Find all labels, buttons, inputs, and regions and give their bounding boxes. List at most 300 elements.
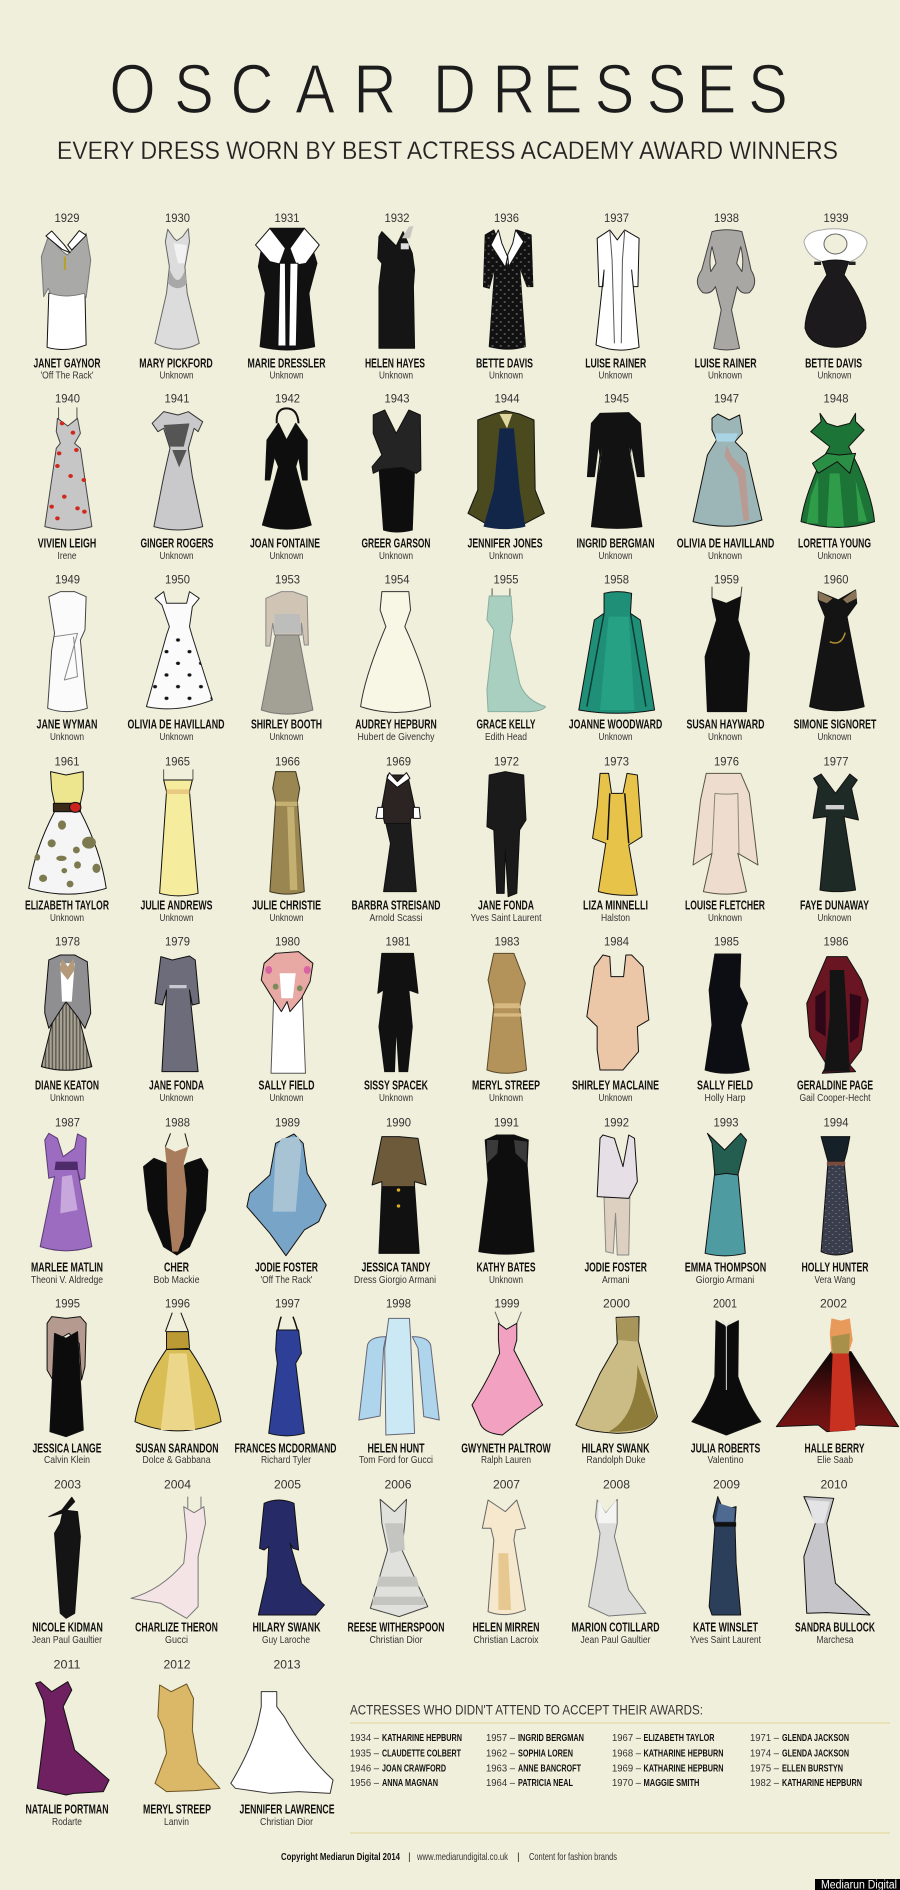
designer: Tom Ford for Gucci [359,1454,433,1466]
entry: 1937 Luise Rainer [585,211,646,382]
name: JOAN FONTAINE [250,536,320,550]
title: OSCAR DRESSES [109,49,788,128]
designer: Unknown [708,370,742,382]
entry: 2008 Marion Cotillard [572,1478,660,1646]
list column 2: 1962 – [486,1748,515,1760]
designer: Unknown [489,370,523,382]
dress: yellow top, white floral skirt [29,772,106,894]
designer: Gail Cooper-Hecht [800,1092,871,1104]
entry: 1959 Susan Hayward [686,572,764,743]
list column 4: 1971 – [750,1733,779,1744]
designer: Arnold Scassi [370,912,422,924]
dress: grey-blue floral gown [693,414,762,526]
dress: bronze column [270,772,304,894]
year: 1991 [494,1116,519,1130]
list column 2: 1957 – [486,1733,515,1744]
designer: Unknown [379,1092,413,1104]
year: 1955 [494,572,519,586]
name: KATE WINSLET [693,1620,758,1634]
dress: grey jacket, white skirt [41,231,91,349]
list column 1 [350,1733,462,1789]
name: GREER GARSON [362,536,430,550]
dress: slate blue one shoulder [709,1497,741,1615]
entry: 1977 Faye Dunaway [800,754,869,924]
dress: red and black shawl [807,957,868,1073]
footer credits: Content for fashion brands [529,1851,617,1863]
name: LUISE RAINER [695,356,757,370]
year: 1944 [494,392,520,406]
entry: 1990 Jessica Tandy [354,1116,436,1286]
entry: 2002 Halle Berry [776,1296,899,1466]
year: 1958 [604,572,629,586]
year: 2004 [164,1478,191,1492]
name: GINGER ROGERS [140,536,214,550]
year: 1981 [386,934,411,948]
entry: 1997 Frances McDormand [234,1296,336,1466]
list column 1: 1956 – [350,1778,379,1789]
entry: 2010 Sandra Bullock [795,1478,875,1646]
name: MERYL STREEP [143,1802,211,1816]
name: AUDREY HEPBURN [355,718,437,732]
dress: pale grey gown [155,229,199,349]
year: 1997 [275,1296,300,1310]
entry: 1978 Diane Keaton [35,934,99,1104]
list column 4: 1982 – [750,1778,779,1789]
entry: 2003 Nicole Kidman [32,1478,103,1646]
designer: Unknown [270,1092,304,1104]
name: SHIRLEY MACLAINE [572,1078,659,1092]
entry: 2007 Helen Mirren [472,1478,540,1646]
entry: 1969 Barbra Streisand [352,754,440,924]
entry: 1947 Olivia de Havilland [677,392,774,562]
designer: Unknown [598,731,633,743]
designer: Unknown [160,370,194,382]
list column 1: ANNA MAGNAN [382,1778,438,1789]
footer credits: | [517,1851,520,1863]
year: 1987 [55,1116,80,1130]
year: 2009 [713,1478,740,1492]
name: SALLY FIELD [697,1078,753,1092]
year: 1931 [274,211,300,225]
name: JODIE FOSTER [255,1260,318,1274]
year: 1960 [824,572,849,586]
year: 2011 [54,1658,81,1672]
list column 3: MAGGIE SMITH [644,1778,700,1789]
list column 3: 1967 – [612,1733,641,1744]
designer: Holly Harp [704,1092,746,1104]
designer: Christian Dior [370,1634,423,1646]
entry: 1950 Olivia de Havilland [128,572,224,743]
list column 4: KATHARINE HEPBURN [782,1778,862,1789]
list column 1: CLAUDETTE COLBERT [382,1748,461,1760]
dress: dark sparkle column [821,1137,853,1255]
entry: 1954 Audrey Hepburn [355,572,437,743]
name: INGRID BERGMAN [576,536,654,550]
dress: slate purple [155,956,199,1072]
dress: black with lace shoulders [810,590,864,711]
entry: 1955 Grace Kelly [476,572,545,743]
name: JODIE FOSTER [584,1260,647,1274]
designer: Unknown [818,550,852,562]
entry: 1940 Vivien Leigh [38,392,96,562]
year: 1936 [494,211,519,225]
dress: yellow with cape [593,773,642,895]
dress: black sequin suit with white collar [376,773,420,892]
entry: 1941 Ginger Rogers [140,392,214,562]
designer: Unknown [270,370,304,382]
entry: 2005 Hilary Swank [252,1478,324,1646]
name: NICOLE KIDMAN [32,1620,103,1634]
list column 3 [612,1733,724,1789]
name: OLIVIA DE HAVILLAND [677,536,774,550]
name: JENNIFER JONES [468,536,542,550]
designer: 'Off The Rack' [260,1274,312,1286]
list column 4: 1974 – [750,1748,779,1760]
name: GWYNETH PALTROW [461,1442,551,1456]
name: JULIA ROBERTS [691,1442,760,1456]
list column 3: 1969 – [612,1764,641,1774]
name: EMMA THOMPSON [685,1260,766,1274]
dress: black long sleeve [587,413,644,528]
dress: white coat [596,230,639,350]
entry: 1988 Cher [144,1116,208,1286]
year: 2001 [713,1296,737,1310]
entry: 1965 Julie Andrews [140,754,212,924]
name: FRANCES MCDORMAND [234,1442,336,1456]
dress: olive cape, navy gown [468,411,544,529]
designer: Unknown [50,1092,84,1104]
year: 2000 [603,1296,630,1310]
name: LOUISE FLETCHER [685,898,765,912]
designer: Unknown [818,370,852,382]
list column 3: 1968 – [612,1748,641,1760]
list column 3: 1970 – [612,1778,641,1789]
dress: purple gown [40,1133,92,1251]
year: 1993 [714,1116,739,1130]
entry: 1932 Helen Hayes [365,211,425,382]
entry: 1989 Jodie Foster [247,1116,326,1286]
name: FAYE DUNAWAY [800,898,869,912]
dress: black mermaid with white piping [692,1321,761,1435]
list column 2: ANNE BANCROFT [518,1764,581,1774]
designer: Jean Paul Gaultier [32,1634,102,1646]
entry: 2006 Reese Witherspoon [348,1478,444,1646]
entry: 1944 Jennifer Jones [468,392,544,562]
entry: 1981 Sissy Spacek [364,934,428,1104]
name: MARION COTILLARD [572,1620,660,1634]
designer: Unknown [50,912,84,924]
name: HILARY SWANK [252,1620,320,1634]
designer: Lanvin [164,1816,189,1828]
year: 1989 [275,1116,300,1130]
designer: Unknown [50,731,84,743]
dress: dark peplum jacket [372,410,421,532]
designer: 'Off The Rack' [40,370,94,382]
year: 2007 [493,1478,520,1492]
list column 3: KATHARINE HEPBURN [644,1764,724,1774]
year: 1949 [55,572,80,586]
year: 2002 [820,1296,847,1310]
year: 1976 [714,754,739,768]
year: 1992 [604,1116,629,1130]
year: 2003 [54,1478,81,1492]
name: DIANE KEATON [35,1078,99,1092]
year: 1929 [54,211,80,225]
footer credits: | [408,1851,411,1863]
dress: orange top, red and black skirt [776,1318,899,1432]
year: 2012 [164,1658,191,1672]
year: 1959 [714,572,739,586]
designer: Unknown [270,550,304,562]
year: 1983 [494,934,520,948]
list column 2: SOPHIA LOREN [518,1748,573,1760]
designer: Elie Saab [817,1454,853,1466]
designer: Unknown [708,731,742,743]
dress: white with black dots [146,592,212,709]
year: 1930 [165,211,190,225]
year: 1973 [604,754,629,768]
designer: Irene [58,550,77,562]
entry: 1998 Helen Hunt [359,1296,439,1466]
dress: grey with dark lace [152,412,203,530]
year: 1941 [164,392,190,406]
entry: 1938 Luise Rainer [695,211,757,382]
designer: Gucci [165,1634,188,1646]
designer: Unknown [489,1274,523,1286]
year: 1986 [824,934,849,948]
name: BETTE DAVIS [476,356,533,370]
dress: white with pink floral shawl [261,952,313,1073]
name: SUSAN SARANDON [136,1442,218,1456]
name: SALLY FIELD [258,1078,314,1092]
designer: Unknown [598,550,633,562]
designer: Unknown [489,1092,523,1104]
year: 1945 [604,392,629,406]
entry: 1996 Susan Sarandon [135,1296,221,1466]
name: GRACE KELLY [476,718,536,732]
name: HOLLY HUNTER [802,1260,868,1274]
year: 1938 [714,211,739,225]
designer: Bob Mackie [154,1274,200,1286]
entry: 1942 Joan Fontaine [250,392,320,562]
dress: black ball gown with white ruff [804,229,867,347]
designer: Unknown [708,912,742,924]
name: JANET GAYNOR [34,356,100,370]
dress: navy long sleeve with train [258,1500,324,1615]
entry: 1980 Sally Field [258,934,314,1104]
name: MERYL STREEP [472,1078,540,1092]
name: OLIVIA DE HAVILLAND [128,718,224,732]
list column 1: KATHARINE HEPBURN [382,1733,462,1744]
dress: black cape with sheer skin panel [144,1133,208,1255]
dress: white-grey textured [370,1499,428,1617]
entry: 2001 Julia Roberts [691,1296,761,1466]
year: 1977 [824,754,849,768]
dress: pink gown [472,1312,543,1435]
dress: black polka dot with lapels [483,230,533,349]
designer: Unknown [160,731,194,743]
entry: 1999 Gwyneth Paltrow [461,1296,551,1466]
dress: beaded jacket, black skirt [372,1137,426,1253]
dress: gold wrap gown [155,1684,220,1792]
entry: 1973 Liza Minnelli [583,754,648,924]
year: 1979 [165,934,190,948]
year: 1953 [275,572,300,586]
year: 1932 [384,211,410,225]
name: REESE WITHERSPOON [348,1620,444,1634]
year: 1988 [165,1116,190,1130]
designer: Marchesa [816,1634,854,1646]
year: 1943 [384,392,410,406]
dress: pale pink with cape [693,773,758,894]
dress: black with lace sleeves [47,1317,86,1437]
year: 1985 [714,934,739,948]
dress: lavender jacket, beige trousers [597,1135,637,1255]
entry: 1960 Simone Signoret [794,572,877,743]
designer: Hubert de Givenchy [358,731,435,743]
entry: 2013 Jennifer Lawrence [231,1658,334,1828]
entry: 1929 Janet Gaynor [34,211,100,382]
name: MARIE DRESSLER [248,356,326,370]
list column 3: KATHARINE HEPBURN [644,1748,724,1760]
designer: Unknown [160,550,194,562]
entry: 1993 Emma Thompson [685,1116,766,1286]
designer: Vera Wang [814,1274,856,1286]
dress: black jumpsuit [378,953,418,1072]
designer: Dolce & Gabbana [142,1454,211,1466]
designer: Unknown [708,550,742,562]
entry: 1987 Marlee Matlin [31,1116,103,1286]
year: 1965 [165,754,190,768]
dress: plum gown with train [36,1682,109,1795]
year: 1980 [275,934,300,948]
year: 2006 [384,1478,412,1492]
name: HELEN HUNT [368,1442,425,1456]
panel heading: ACTRESSES WHO DIDN'T ATTEND TO ACCEPT THEIR AWARDS: [350,1702,703,1718]
entry: 1966 Julie Christie [252,754,321,924]
dress: emerald green gown [579,592,655,713]
entry: 1985 Sally Field [697,934,753,1104]
dress: grey with red roses [45,407,92,530]
designer: Jean Paul Gaultier [580,1634,651,1646]
entry: 1948 Loretta Young [798,392,875,562]
dress: khaki satin [576,1317,657,1433]
name: HELEN HAYES [365,356,425,370]
designer: Edith Head [485,731,527,743]
entry: 1983 Meryl Streep [472,934,540,1104]
name: JANE FONDA [478,898,534,912]
dress: blue satin with drape [247,1134,326,1256]
year: 2008 [603,1478,630,1492]
list column 1: JOAN CRAWFORD [382,1764,446,1774]
name: CHER [164,1260,189,1274]
year: 1984 [604,934,629,948]
footer credits [281,1851,617,1863]
list column 1: 1935 – [350,1748,379,1760]
subtitle: EVERY DRESS WORN BY BEST ACTRESS ACADEMY AWARD WINNERS [57,137,838,165]
designer: Halston [601,912,630,924]
year: 1942 [275,392,300,406]
year: 1939 [824,211,849,225]
entry: 1979 Jane Fonda [149,934,204,1104]
name: SUSAN HAYWARD [686,718,764,732]
dress: black with beaded sleeves [479,1135,534,1254]
dress: black pantsuit [487,772,526,897]
designer: Christian Lacroix [474,1634,539,1646]
dress: white draped [48,592,87,712]
name: JULIE CHRISTIE [252,898,321,912]
entry: 1986 Geraldine Page [797,934,873,1104]
entry: 1976 Louise Fletcher [685,754,765,924]
entry: 1995 Jessica Lange [32,1296,102,1466]
entry: 1945 Ingrid Bergman [576,392,654,562]
entry: 2012 Meryl Streep [143,1658,220,1828]
list column 2: PATRICIA NEAL [518,1778,573,1789]
dress: cream ball gown [361,592,431,712]
entry: 1931 Marie Dressler [248,211,326,382]
entry: 1958 Joanne Woodward [569,572,662,743]
dress: grey bell sleeves [697,230,755,350]
entry: 1936 Bette Davis [476,211,533,382]
dress: black one shoulder [49,1497,80,1618]
dress: cream gold [482,1500,525,1615]
dress: royal blue halter [269,1317,304,1436]
designer: Armani [602,1274,629,1286]
designer: Unknown [379,550,413,562]
designer: Valentino [708,1454,744,1466]
entry: 1949 Jane Wyman [36,572,98,743]
name: BARBRA STREISAND [352,898,440,912]
entry: 1943 Greer Garson [362,392,430,562]
list column 4 [750,1733,862,1789]
list column 3: ELIZABETH TAYLOR [644,1733,715,1744]
name: JESSICA LANGE [32,1442,102,1456]
year: 1966 [275,754,300,768]
name: JOANNE WOODWARD [569,718,662,732]
dress: beige top, grey skirt [261,592,313,714]
designer: Yves Saint Laurent [690,1634,761,1646]
designer: Randolph Duke [586,1454,646,1466]
dress: pale yellow empire [160,769,198,896]
designer: Theoni V. Aldredge [31,1274,103,1286]
name: HELEN MIRREN [472,1620,540,1634]
panel: actresses who did not attend [350,1702,890,1834]
year: 1937 [604,211,629,225]
name: JANE WYMAN [36,718,98,732]
dress: silver with train [804,1497,870,1615]
name: ELIZABETH TAYLOR [25,898,109,912]
entry: 1991 Kathy Bates [476,1116,536,1286]
dress: black layered [705,954,749,1073]
designer: Unknown [598,370,633,382]
dress: black drop waist [378,226,415,348]
list column 4: GLENDA JACKSON [782,1733,849,1744]
designer: Calvin Klein [44,1454,90,1466]
designer: Richard Tyler [261,1454,311,1466]
entry: 2000 Hilary Swank [576,1296,657,1466]
dress: pale teal [487,588,545,712]
name: BETTE DAVIS [805,356,862,370]
designer: Unknown [270,731,304,743]
entry: 1961 Elizabeth Taylor [25,754,109,924]
entry: 1992 Jodie Foster [584,1116,647,1286]
list column 4: GLENDA JACKSON [782,1748,849,1760]
name: JENNIFER LAWRENCE [240,1802,334,1816]
name: SISSY SPACEK [364,1078,428,1092]
dress: white lace mermaid [589,1499,646,1616]
footer credits: www.mediarundigital.co.uk [416,1851,509,1863]
dress: black halter [262,408,311,529]
